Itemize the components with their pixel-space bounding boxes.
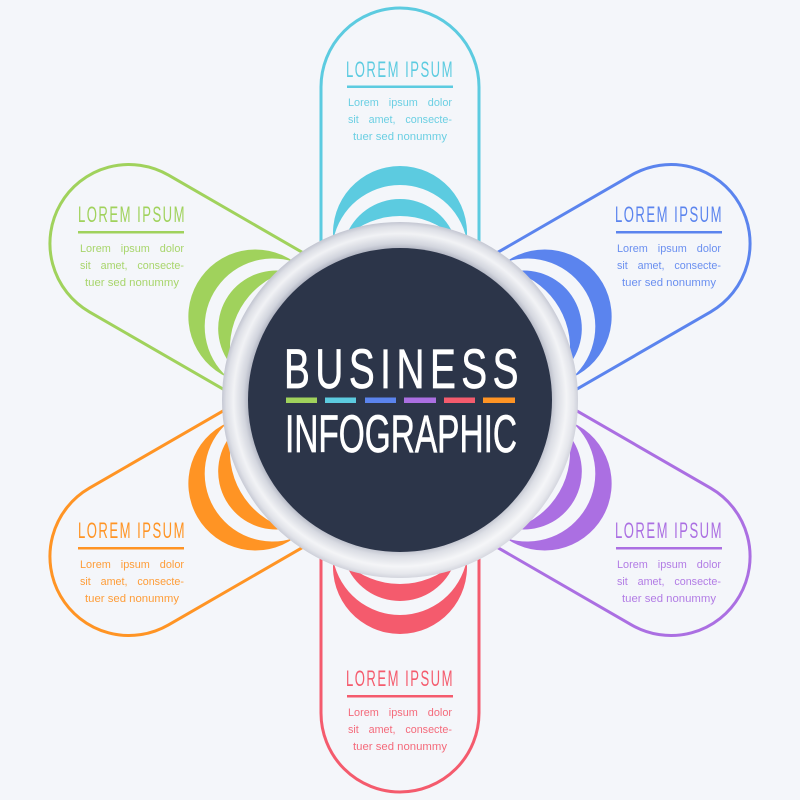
- text block: blue: tuer sed nonummy: [622, 277, 717, 289]
- text block: red: LOREM IPSUM: [346, 666, 454, 691]
- panel: green upper-left petal: [21, 136, 440, 468]
- text block: red: [346, 666, 454, 753]
- text block: green: Lorem ipsum dolor: [80, 243, 184, 255]
- text block: blue: [615, 202, 723, 289]
- text block: orange: sit amet, consecte-: [80, 576, 184, 588]
- text block: green: [78, 202, 186, 289]
- text block: cyan: [346, 57, 454, 143]
- panel: orange lower-left petal: [21, 332, 440, 664]
- text block: green: tuer sed nonummy: [85, 277, 180, 289]
- text block: purple: LOREM IPSUM: [615, 518, 723, 543]
- text block: orange: [78, 518, 186, 605]
- text block: cyan: LOREM IPSUM: [346, 57, 454, 82]
- title: BUSINESS: BUSINESS: [284, 337, 524, 400]
- text block: green: sit amet, consecte-: [80, 260, 184, 272]
- text block: orange: LOREM IPSUM: [78, 518, 186, 543]
- text block: purple: Lorem ipsum dolor: [617, 559, 721, 571]
- panel: red bottom petal: [321, 400, 479, 792]
- text block: blue: LOREM IPSUM: [615, 202, 723, 227]
- text block: blue: Lorem ipsum dolor: [617, 243, 721, 255]
- text block: red: Lorem ipsum dolor: [348, 707, 452, 719]
- text block: cyan: sit amet, consecte-: [348, 114, 452, 126]
- text block: blue: sit amet, consecte-: [617, 260, 721, 272]
- text block: orange: tuer sed nonummy: [85, 593, 180, 605]
- text block: cyan: tuer sed nonummy: [353, 131, 448, 143]
- text block: purple: tuer sed nonummy: [622, 593, 717, 605]
- text block: green: LOREM IPSUM: [78, 202, 186, 227]
- central badge: [222, 222, 578, 578]
- text block: purple: sit amet, consecte-: [617, 576, 721, 588]
- panel: blue upper-right petal: [360, 136, 779, 468]
- text block: orange: Lorem ipsum dolor: [80, 559, 184, 571]
- text block: cyan: Lorem ipsum dolor: [348, 97, 452, 109]
- text block: purple: [615, 518, 723, 605]
- panel: purple lower-right petal: [360, 332, 779, 664]
- text block: red: tuer sed nonummy: [353, 741, 448, 753]
- title: INFOGRAPHIC: INFOGRAPHIC: [285, 405, 517, 464]
- colour bars: [286, 398, 515, 403]
- panel: cyan top petal: [321, 8, 479, 400]
- text block: red: sit amet, consecte-: [348, 724, 452, 736]
